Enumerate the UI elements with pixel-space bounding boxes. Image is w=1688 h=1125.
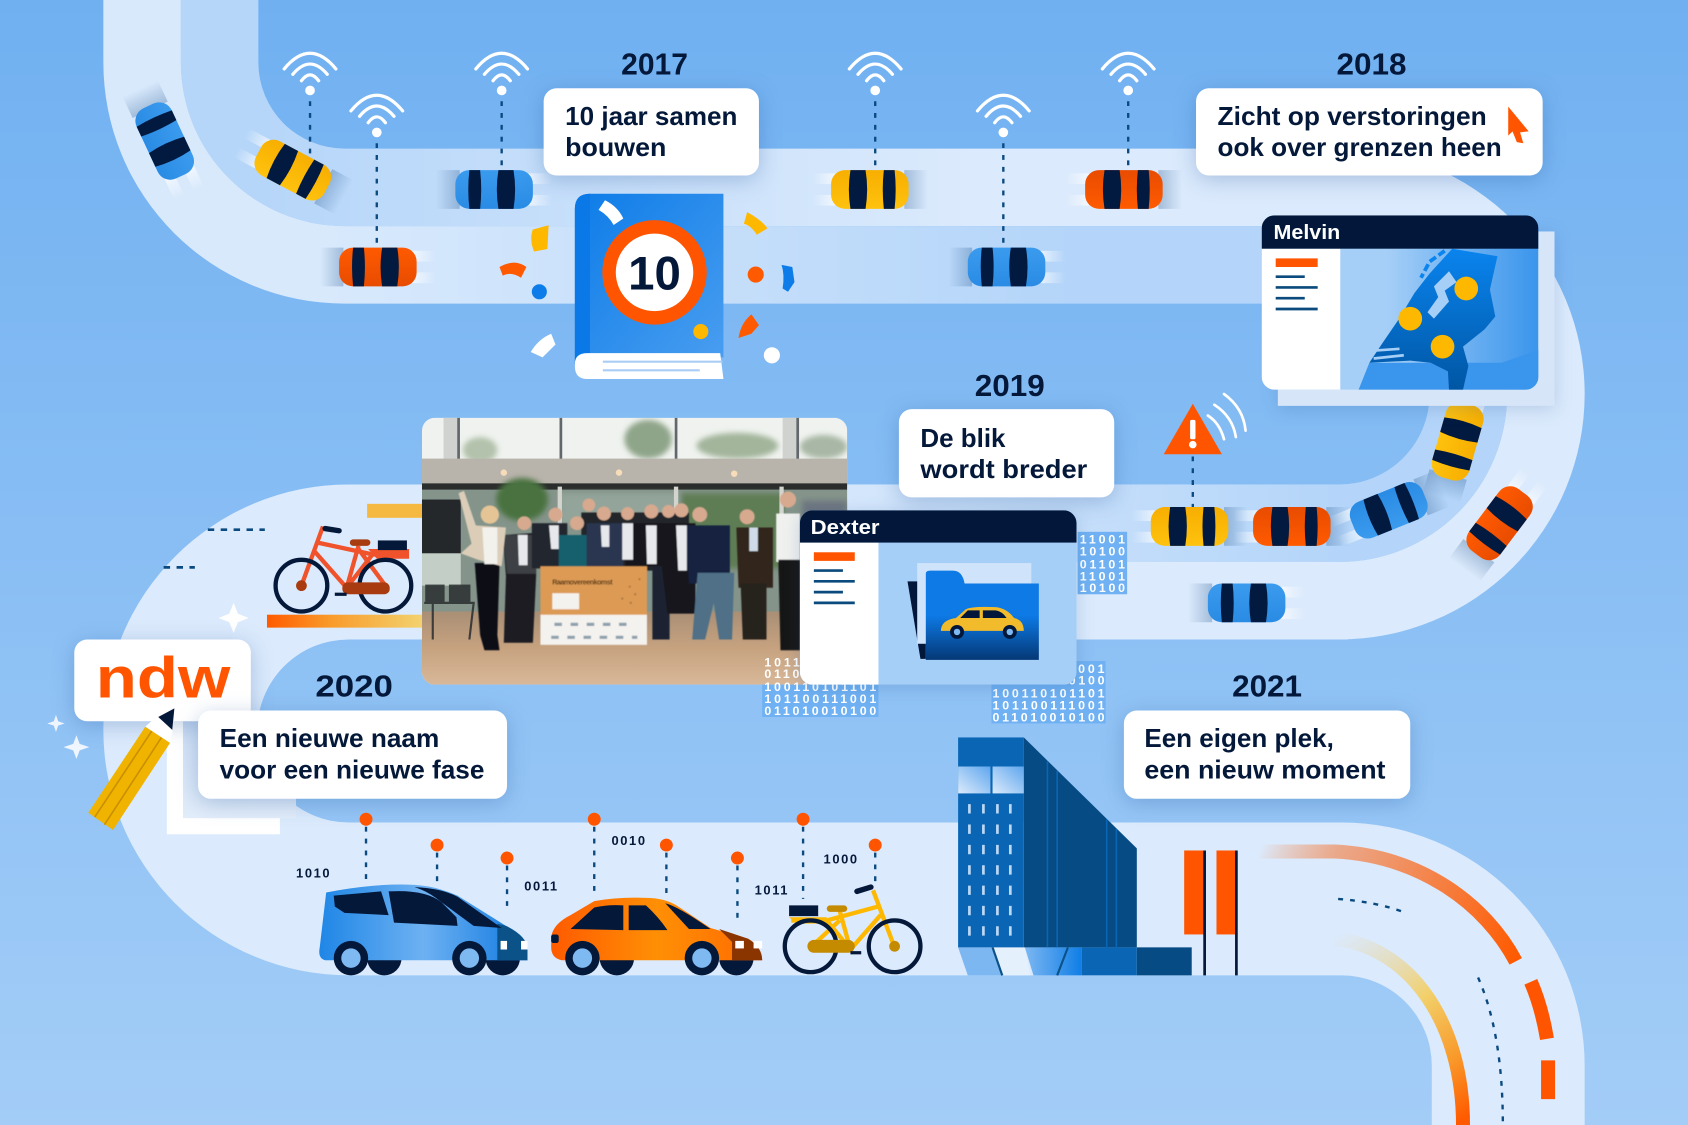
binary labels: 1011 xyxy=(755,883,789,898)
cars top road xyxy=(123,80,1182,286)
binary block: photo corner: 100110101101 xyxy=(764,680,876,694)
binary block right: 01101 xyxy=(1080,557,1125,571)
heading 2021: 2021 xyxy=(1232,671,1302,704)
road arcs xyxy=(1260,852,1548,1125)
data pins and lines xyxy=(360,813,882,924)
icon: orange car xyxy=(551,898,762,975)
person 2 xyxy=(503,533,536,643)
photo: team: Raamovereenkomst xyxy=(552,580,613,587)
logo card: ndw xyxy=(74,639,251,721)
card 2018 xyxy=(1196,88,1543,175)
binary labels xyxy=(296,833,859,898)
board xyxy=(540,566,647,616)
binary block: Dexter corner: 011010010100 xyxy=(993,710,1105,724)
map: Netherlands xyxy=(1369,249,1497,390)
binary block: photo corner: 101100111001 xyxy=(764,655,876,669)
binary block: Dexter corner: 011010010100 xyxy=(993,674,1105,688)
binary labels: 0010 xyxy=(611,833,647,848)
sensor lines xyxy=(310,101,1193,508)
card 2017: bouwen xyxy=(565,134,666,162)
heading 2020: 2020 xyxy=(315,671,393,704)
back row xyxy=(581,512,689,571)
person 4 xyxy=(559,535,587,567)
shirts xyxy=(518,523,687,571)
person 1 xyxy=(475,563,500,650)
binary labels: 1010 xyxy=(296,865,331,880)
binary block: Dexter corner: 101100111001 xyxy=(993,662,1105,676)
card 2020 xyxy=(198,711,507,799)
card 2020: voor een nieuwe fase xyxy=(220,756,484,784)
binary labels: 0011 xyxy=(524,878,559,893)
card 2017 xyxy=(544,88,759,175)
person 11 xyxy=(686,525,730,583)
person 13 xyxy=(776,514,800,562)
binary block: photo corner: 101100111001 xyxy=(764,692,876,706)
card 2017: 10 jaar samen xyxy=(565,103,737,131)
bike markings xyxy=(164,504,422,628)
card 2021 xyxy=(1124,711,1410,799)
binary block right: 10100 xyxy=(1080,581,1125,595)
logo card: ndw: ndw xyxy=(96,647,231,711)
icon: alert triangle xyxy=(1164,394,1246,454)
binary block: photo corner xyxy=(762,655,878,718)
card 2021: een nieuw moment xyxy=(1144,756,1386,784)
panel: Dexter xyxy=(800,510,1077,685)
wifi icons xyxy=(284,53,1154,137)
binary block: Dexter corner: 100110101101 xyxy=(993,687,1105,701)
icon: anniversary book: 10 xyxy=(628,248,681,301)
card 2018: Zicht op verstoringen xyxy=(1218,103,1487,131)
photo: team xyxy=(422,418,847,685)
heading 2019: 2019 xyxy=(975,370,1045,403)
binary block: Dexter corner xyxy=(991,661,1106,724)
icon: orange bicycle xyxy=(276,526,411,611)
icon: pencil xyxy=(88,708,174,830)
person 12 xyxy=(736,528,773,588)
binary block: photo corner: 011010010100 xyxy=(764,667,876,681)
sparkles xyxy=(47,603,249,759)
road: inner lane xyxy=(103,0,1507,562)
binary block right: 10100 xyxy=(1080,545,1125,559)
binary block: photo corner: 011010010100 xyxy=(764,704,876,718)
icon: yellow bicycle xyxy=(785,887,920,972)
card 2021: Een eigen plek, xyxy=(1144,725,1334,753)
binary block: Dexter corner: 101100111001 xyxy=(993,698,1105,712)
card 2019: De blik xyxy=(920,425,1006,453)
panel: Melvin xyxy=(1262,215,1555,406)
card 2019 xyxy=(899,409,1114,497)
binary labels: 1000 xyxy=(824,851,859,866)
heads xyxy=(517,491,796,530)
confetti xyxy=(500,212,794,363)
road: outer lane xyxy=(181,0,1585,639)
binary block right: 11001 xyxy=(1080,569,1125,583)
binary block right: 11001 xyxy=(1080,533,1125,547)
card 2019: wordt breder xyxy=(919,456,1087,484)
panel: Dexter: Dexter xyxy=(811,516,880,539)
icon: cursor xyxy=(1508,107,1529,143)
heading 2017: 2017 xyxy=(621,48,688,81)
cars right bend xyxy=(1131,380,1550,622)
icon: blue car xyxy=(319,885,528,975)
paper sheets xyxy=(167,711,296,834)
card 2020: Een nieuwe naam xyxy=(220,725,439,753)
binary block right xyxy=(1078,532,1127,595)
icon: anniversary book xyxy=(575,194,723,379)
panel: Melvin: Melvin xyxy=(1274,221,1340,244)
heading 2018: 2018 xyxy=(1337,48,1406,81)
icon: office building xyxy=(958,737,1192,975)
road: middle and bottom section xyxy=(103,484,1585,1125)
card 2018: ook over grenzen heen xyxy=(1218,134,1502,162)
road dashed guides xyxy=(1338,899,1503,1125)
icon: folder with car xyxy=(908,563,1039,660)
icon: flags xyxy=(1184,850,1236,975)
